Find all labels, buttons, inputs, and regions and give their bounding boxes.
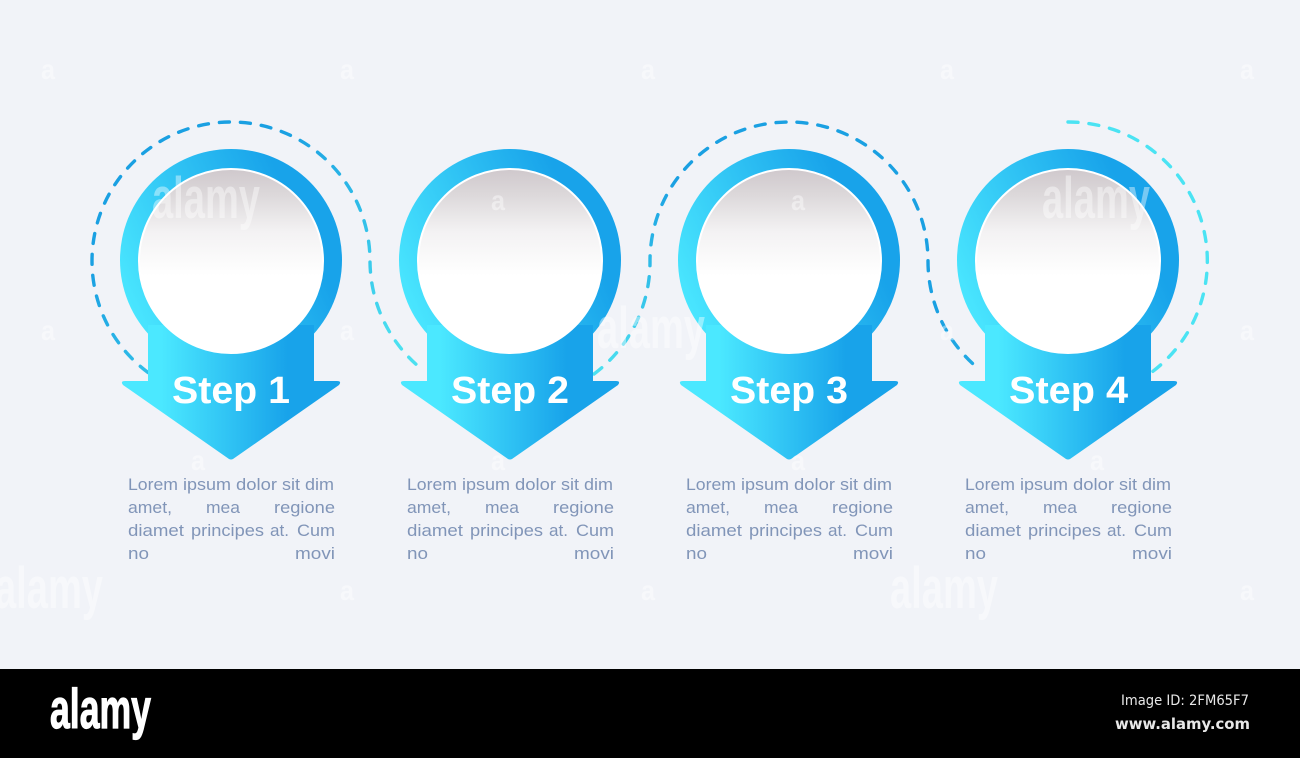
text block: step 2 description: principes [470,522,543,540]
text block: step 2 description: dim [584,476,613,494]
watermarks: a [1240,315,1254,346]
watermarks: a [340,315,354,346]
text block: step 1 description: amet, [128,499,172,517]
alamy logo: alamy [50,677,151,740]
panel: step 2 [399,149,621,460]
text block: step 3 description [686,476,893,563]
text block: step 4 description: ipsum [1020,476,1068,494]
site url: www.alamy.com [1115,715,1250,733]
text block: step 2 description: diamet [407,522,463,540]
watermarks: a [1090,445,1104,476]
watermarks: a [340,575,354,606]
text block: step 1 description: regione [274,499,335,517]
dashed connector: step 2 to step 3 to step 4 [594,122,980,374]
text block: step 2 description: ipsum [462,476,510,494]
watermarks: a [41,54,55,85]
text block: step 1 description: diamet [128,522,184,540]
text block: step 3 description: movi [853,545,893,563]
watermarks: alamy [1042,166,1150,231]
watermarks: alamy [597,296,705,361]
text block: step 2 description: mea [485,499,520,517]
panel: step 4 [957,149,1179,460]
text block: step 4 description: no [965,545,986,563]
text block: step 4 description: amet, [965,499,1009,517]
text block: step 3 description: dolor [794,476,836,494]
text block: step 2 description [407,476,614,563]
text block: step 2 description: Cum [576,522,614,540]
ring [120,149,342,371]
text block: step 4 description: mea [1043,499,1078,517]
ring [678,149,900,371]
step label: Step 1 [172,370,290,412]
dashed connector: step 4 end [1068,122,1207,372]
dashed connector: step 1 to step 2 [92,122,424,372]
watermarks: a [491,185,505,216]
footer bar [0,669,1300,758]
step label: Step 3 [730,370,848,412]
text block: step 1 description: at. [270,522,289,540]
text block: step 2 description: regione [553,499,614,517]
text block: step 3 description: ipsum [741,476,789,494]
text block: step 3 description: diamet [686,522,742,540]
watermarks [0,54,1254,621]
text block: step 3 description: mea [764,499,799,517]
watermarks: a [1240,54,1254,85]
watermarks: a [641,575,655,606]
watermarks: a [41,315,55,346]
text block: step 1 description: principes [191,522,264,540]
watermarks: a [191,445,205,476]
text block: step 1 description: ipsum [183,476,231,494]
text block: step 4 description: principes [1028,522,1101,540]
text block: step 2 description: amet, [407,499,451,517]
watermarks: alamy [152,166,260,231]
text block: step 3 description: at. [828,522,847,540]
text block: step 4 description: sit [1119,476,1137,494]
text block: step 2 description: at. [549,522,568,540]
arrow [122,325,340,460]
text block: step 4 description: Cum [1134,522,1172,540]
text block: step 1 description: movi [295,545,335,563]
text block: step 1 description: dim [305,476,334,494]
text block: step 1 description: mea [206,499,241,517]
text block: step 1 description [128,476,335,563]
arrow [680,325,898,460]
text block: step 3 description: amet, [686,499,730,517]
text block: step 4 description: regione [1111,499,1172,517]
text block: step 1 description: Cum [297,522,335,540]
text block: step 4 description: dolor [1073,476,1115,494]
text block: step 2 description: no [407,545,428,563]
text block: step 4 description: at. [1107,522,1126,540]
text block: step 1 description: dolor [236,476,278,494]
text block: step 3 description: regione [832,499,893,517]
watermarks: a [791,445,805,476]
arrow [401,325,619,460]
text block: step 2 description: Lorem [407,476,457,494]
image placeholder circle [139,169,323,353]
watermarks: alamy [890,556,998,621]
watermarks: a [791,185,805,216]
text block: step 1 description: Lorem [128,476,178,494]
text block: step 3 description: Lorem [686,476,736,494]
ring [399,149,621,371]
text block: step 3 description: dim [863,476,892,494]
panel: step 1 [120,149,342,460]
image placeholder circle [976,169,1160,353]
text block: step 2 description: sit [561,476,579,494]
step label: Step 4 [1009,370,1128,412]
text block: step 3 description: principes [749,522,822,540]
text block: step 4 description [965,476,1172,563]
text block: step 3 description: no [686,545,707,563]
image placeholder circle [697,169,881,353]
arrow [959,325,1177,460]
text block: step 4 description: movi [1132,545,1172,563]
text block: step 4 description: Lorem [965,476,1015,494]
text block: step 4 description: diamet [965,522,1021,540]
text block: step 4 description: dim [1142,476,1171,494]
text block: step 1 description: sit [282,476,300,494]
text block: step 2 description: movi [574,545,614,563]
panel: step 3 [678,149,900,460]
watermarks: a [940,54,954,85]
text block: step 2 description: dolor [515,476,557,494]
watermarks: a [1240,575,1254,606]
watermarks: a [940,315,954,346]
text block: step 3 description: Cum [855,522,893,540]
image placeholder circle [418,169,602,353]
ring [957,149,1179,371]
watermarks: a [491,445,505,476]
step label: Step 2 [451,370,569,412]
watermarks: a [641,54,655,85]
text block: step 1 description: no [128,545,149,563]
text block: step 3 description: sit [840,476,858,494]
watermarks: a [340,54,354,85]
image id: Image ID: 2FM65F7 [1121,693,1249,709]
